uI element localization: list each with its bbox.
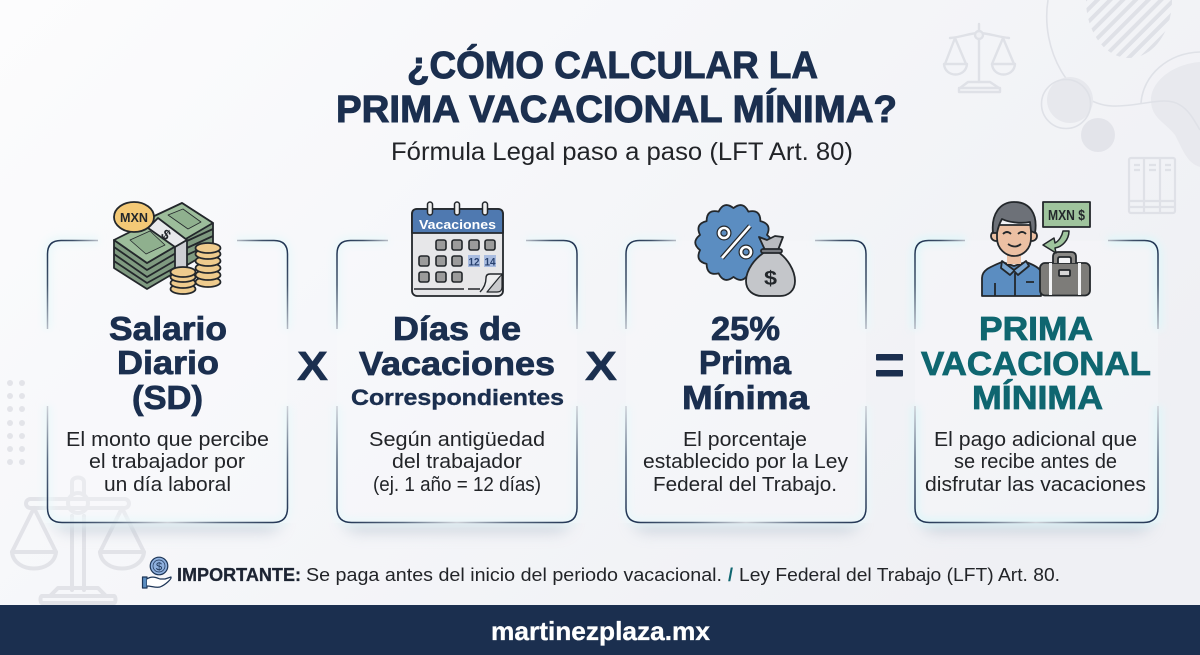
icon: coin in hand: $ <box>156 561 162 573</box>
heading: Mínima <box>682 379 810 416</box>
important note: / <box>728 565 733 585</box>
important note: Ley Federal del Trabajo (LFT) Art. 80. <box>739 565 1060 585</box>
heading: PRIMA <box>979 310 1093 347</box>
title: PRIMA VACACIONAL MÍNIMA? <box>336 87 897 131</box>
heading <box>682 310 810 416</box>
heading <box>921 310 1151 416</box>
icon: calendar: 14 <box>484 256 496 268</box>
operator: equals <box>876 354 903 376</box>
description: del trabajador <box>392 451 522 473</box>
operator: multiply: X <box>297 343 328 389</box>
heading: Salario <box>109 310 227 347</box>
decoration: dots <box>7 380 25 465</box>
description: El pago adicional que <box>934 429 1137 451</box>
description: el trabajador por <box>89 451 245 473</box>
description: se recibe antes de <box>954 451 1117 473</box>
title <box>336 43 897 131</box>
footer bar <box>0 605 1200 655</box>
panel: salario diario <box>48 202 288 531</box>
decoration: top right shapes <box>1042 0 1200 167</box>
icon: calendar: Vacaciones <box>419 217 496 232</box>
icon: calendar: 12 <box>468 256 480 268</box>
description <box>925 429 1146 496</box>
description: El porcentaje <box>683 429 807 451</box>
heading: (SD) <box>132 379 203 416</box>
card background <box>915 240 1158 531</box>
description: Según antigüedad <box>369 429 545 451</box>
icon: money and coins: $ <box>158 226 174 243</box>
heading: Diario <box>117 344 219 381</box>
heading: Vacaciones <box>359 345 555 382</box>
important note: IMPORTANTE: <box>177 565 301 585</box>
subtitle: Fórmula Legal paso a paso (LFT Art. 80) <box>391 138 853 166</box>
icon: money and coins <box>114 202 220 294</box>
card background <box>628 523 862 538</box>
title: ¿CÓMO CALCULAR LA <box>407 43 818 87</box>
panel: resultado prima vacacional <box>915 202 1158 531</box>
icon: worker with suitcase and banknote <box>982 202 1090 296</box>
description: disfrutar las vacaciones <box>925 474 1146 496</box>
icon: percent badge and money bag <box>695 205 795 296</box>
description <box>66 429 269 496</box>
description: un día laboral <box>104 474 231 496</box>
operator: multiply: X <box>585 343 617 389</box>
footer url: martinezplaza.mx <box>491 616 711 646</box>
description: El monto que percibe <box>66 429 269 451</box>
heading: Correspondientes <box>351 385 564 410</box>
card frame <box>626 240 866 522</box>
card frame <box>48 240 288 522</box>
icon: coin in hand <box>142 557 171 588</box>
heading: VACACIONAL <box>921 345 1151 382</box>
heading: MÍNIMA <box>972 379 1103 416</box>
heading: 25% <box>711 310 780 347</box>
panel: dias de vacaciones <box>337 202 577 531</box>
description <box>643 429 848 496</box>
heading: Días de <box>393 310 521 347</box>
icon: calendar <box>412 202 503 296</box>
description <box>369 429 545 496</box>
decoration: bottom left scale <box>12 478 144 603</box>
icon: worker with suitcase and banknote: MXN $ <box>1048 207 1086 224</box>
card background <box>337 240 577 531</box>
important note <box>177 565 1060 585</box>
heading <box>109 310 227 416</box>
description: (ej. 1 año = 12 días) <box>373 474 541 496</box>
description: establecido por la Ley <box>643 451 848 473</box>
description: Federal del Trabajo. <box>653 474 837 496</box>
panel: prima minima <box>626 205 866 531</box>
icon: percent badge and money bag: $ <box>764 268 777 290</box>
decoration: books <box>1129 158 1175 213</box>
card frame <box>915 240 1158 522</box>
card background <box>48 240 288 531</box>
card frame <box>337 240 577 522</box>
heading: Prima <box>699 344 792 381</box>
icon: money and coins: MXN <box>120 210 148 225</box>
heading <box>351 310 564 410</box>
important note: Se paga antes del inicio del periodo vacacional. <box>306 565 722 585</box>
decoration: top scale icon <box>944 24 1015 92</box>
